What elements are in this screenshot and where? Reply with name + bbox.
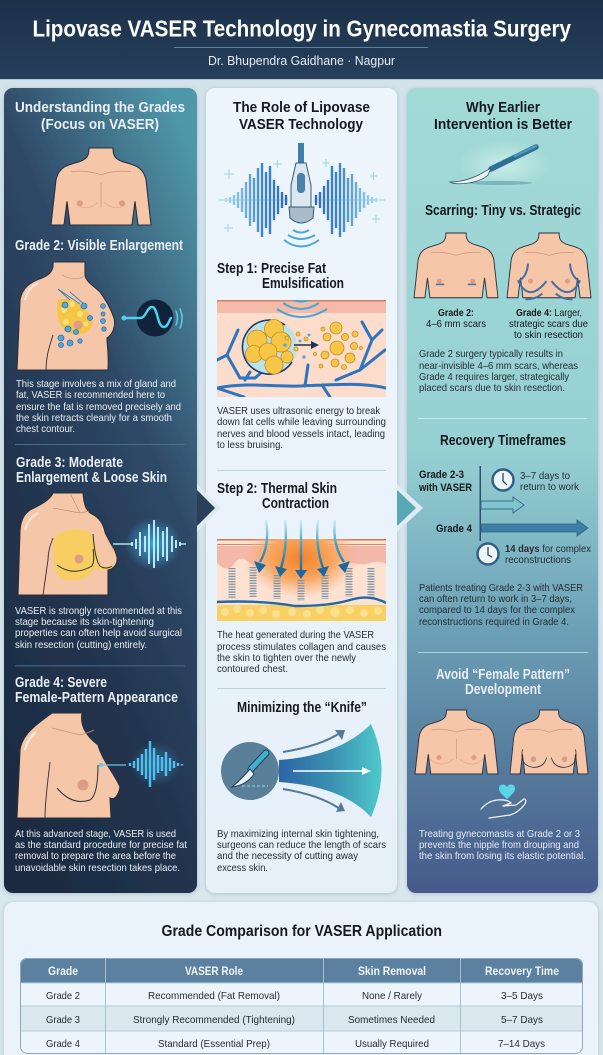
- text: minimizing description: [217, 828, 386, 874]
- heading: role of vaser: VASER Technology: [239, 117, 363, 133]
- text: grade 4 description: At this advanced stage, VASER is used: [15, 828, 176, 840]
- text: step 1 description: down fat cells while leaving surrounding: [217, 416, 386, 428]
- table row: grade 2: Grade 2: [46, 990, 80, 1002]
- heading: grade 4: Female-Pattern Appearance: [15, 690, 178, 706]
- text: step 1 description: VASER uses ultrasonic energy to break: [217, 405, 381, 417]
- label: 3-7 days: 3–7 days to: [520, 470, 570, 482]
- table row: grade 2: [46, 990, 543, 1002]
- caption: grade 2 scars: [426, 307, 486, 330]
- heading: understanding the grades: (Focus on VASER): [41, 117, 159, 133]
- illustration: male-pattern torso: [415, 710, 498, 774]
- heading: step 2: Contraction: [262, 496, 329, 512]
- text: step 2 description: contoured chest.: [217, 663, 288, 675]
- text: avoid description: [419, 828, 586, 862]
- heading: why earlier intervention: Intervention is Better: [434, 117, 572, 133]
- text: grade 4 description: [15, 828, 187, 874]
- heading: role of vaser: [233, 100, 370, 133]
- text: step 1 description: to less bruising.: [217, 439, 283, 451]
- table row: grade 3: Strongly Recommended (Tightening): [133, 1014, 295, 1026]
- text: avoid description: prevents the nipple from drouping and: [419, 839, 579, 851]
- text: scarring description: placed scars due to skin resection.: [419, 382, 565, 394]
- connector arrow: middle to right: [397, 484, 423, 532]
- table row: grade 3: 5–7 Days: [501, 1014, 543, 1026]
- table header row: Grade: [48, 966, 78, 978]
- text: grade 4 description: unavoidable skin resection takes place.: [15, 862, 180, 874]
- label: 14 days: [505, 543, 592, 566]
- text: grade 4 description: as the standard procedure for precise fat: [15, 839, 187, 851]
- text: step 1 description: nerves and blood vessels intact, leading: [217, 428, 385, 440]
- table: grade comparison: [20, 958, 583, 1055]
- text: grade 3 description: VASER is strongly recommended at this: [15, 605, 182, 617]
- heading: recovery timeframes: Recovery Timeframes: [440, 433, 566, 449]
- heading: minimizing the knife: Minimizing the “Knife”: [237, 700, 367, 716]
- heading: step 1: Emulsification: [262, 276, 344, 292]
- text: avoid description: Treating gynecomastis at Grade 2 or 3: [419, 828, 580, 840]
- heading: role of vaser: The Role of Lipovase: [233, 100, 370, 116]
- table row: grade 2: 3–5 Days: [501, 990, 543, 1002]
- panel: understanding the grades: [4, 88, 197, 893]
- heading: step 1: [217, 261, 344, 292]
- illustration: grade 2 torso with tiny scars: [414, 233, 498, 298]
- heading: step 1: Step 1: Precise Fat: [217, 261, 326, 277]
- text: step 1 description: [217, 405, 386, 451]
- heading: understanding the grades: Understanding the Grades: [15, 100, 185, 116]
- text: avoid description: the skin from losing its elastic potential.: [419, 850, 586, 862]
- illustration: female-pattern torso: [510, 710, 588, 774]
- text: grade 4 description: removal to prepare the area before the: [15, 850, 176, 862]
- caption: grade 2 scars: 4–6 mm scars: [426, 318, 486, 330]
- heading: step 2: Step 2: Thermal Skin: [217, 481, 337, 497]
- text: step 2 description: The heat generated during the VASER: [217, 629, 374, 641]
- text: grade 3 description: properties can often help avoid surgical: [15, 627, 182, 639]
- icon: heart over open hand: [481, 784, 526, 818]
- caption: grade 4 scars: strategic scars due: [509, 318, 588, 330]
- text: minimizing description: excess skin.: [217, 862, 268, 874]
- text: grade 2 description: the skin retracts cleanly for a smooth: [16, 412, 172, 424]
- subtitle: Dr. Bhupendra Gaidhane · Nagpur: [208, 54, 395, 68]
- text: grade 2 description: This stage involves a mix of gland and: [16, 378, 176, 390]
- text: recovery description: Patients treating Grade 2-3 with VASER: [419, 582, 583, 594]
- text: step 2 description: [217, 629, 386, 675]
- text: recovery description: compared to 14 days for the complex: [419, 604, 576, 616]
- caption: grade 4 scars: Grade 4: Larger,: [516, 307, 582, 319]
- text: scarring description: Grade 4 requires larger, strategically: [419, 371, 570, 383]
- heading: step 2: [217, 481, 337, 512]
- table header row: Skin Removal: [358, 966, 426, 978]
- text: recovery description: can often return to work in 3–7 days,: [419, 593, 572, 605]
- table row: grade 3: [46, 1014, 543, 1026]
- heading: grade 3: [16, 455, 167, 486]
- chart: recovery timeline: [418, 466, 592, 566]
- label: 3-7 days: return to work: [520, 481, 580, 493]
- table header row: Recovery Time: [485, 966, 559, 978]
- table row: grade 4: Grade 4: [46, 1038, 80, 1050]
- text: step 2 description: process stimulates collagen and causes: [217, 641, 386, 653]
- heading: avoid female pattern: Avoid “Female Pattern”: [436, 667, 570, 683]
- illustration: grade 4 torso with larger scars: [507, 233, 591, 299]
- table row: grade 2: None / Rarely: [362, 990, 423, 1002]
- panel: grade comparison table: [4, 902, 598, 1055]
- panel: why earlier intervention: [407, 88, 598, 893]
- heading: avoid female pattern: Development: [465, 682, 541, 698]
- header banner: [0, 0, 603, 80]
- table header row: [48, 966, 559, 978]
- connector arrow: left to middle: [197, 484, 221, 532]
- text: grade 2 description: chest contour.: [16, 423, 75, 435]
- text: grade 2 description: ensure the fat is removed precisely and: [16, 401, 181, 413]
- icon: ultrasound waveform grade 3: [113, 518, 186, 570]
- caption: grade 4 scars: [509, 307, 588, 341]
- label: 14 days: reconstructions: [505, 554, 571, 566]
- heading: grade 3: Enlargement & Loose Skin: [16, 470, 167, 486]
- illustration: grade 4 chest: [17, 713, 120, 818]
- table row: grade 2: Recommended (Fat Removal): [148, 990, 280, 1002]
- table row: grade 4: [46, 1038, 545, 1050]
- heading: avoid female pattern: [436, 667, 570, 698]
- icon: vaser probe with waves: [219, 143, 385, 246]
- heading: why earlier intervention: [434, 100, 572, 133]
- arrow: grade 4 recovery: [481, 520, 588, 536]
- text: grade 3 description: skin resection (cutting) entirely.: [15, 639, 147, 651]
- illustration: male chest: [51, 148, 151, 225]
- text: scarring description: Grade 2 surgery typically results in: [419, 348, 563, 360]
- table row: grade 3: Grade 3: [46, 1014, 80, 1026]
- illustration: fat emulsification: [217, 298, 386, 397]
- illustration: grade 2 chest with fat and gland: [17, 262, 115, 370]
- text: scarring description: [419, 348, 578, 394]
- text: recovery description: [419, 582, 583, 628]
- text: minimizing description: By maximizing internal skin tightening,: [217, 828, 379, 840]
- table row: grade 4: 7–14 Days: [498, 1038, 545, 1050]
- panel: role of lipovase vaser: [206, 88, 397, 893]
- text: grade 2 description: fat, VASER is recommended here to: [16, 389, 165, 401]
- heading: grade 4: Grade 4: Severe: [15, 675, 107, 691]
- heading: grade 3: Grade 3: Moderate: [16, 455, 123, 471]
- text: grade 2 description: [16, 378, 181, 435]
- icon: ultrasound waveform grade 4: [99, 741, 182, 787]
- text: grade 3 description: [15, 605, 182, 651]
- heading: grade 2: Grade 2: Visible Enlargement: [15, 238, 183, 254]
- caption: grade 2 scars: Grade 2:: [438, 307, 474, 319]
- label: grade 2-3: Grade 2-3: [419, 469, 464, 481]
- illustration: scalpel and skin tightening fan: [221, 724, 382, 817]
- illustration: grade 3 chest: [18, 493, 117, 595]
- table row: grade 4: Usually Required: [355, 1038, 429, 1050]
- text: step 2 description: the skin to tighten over the newly: [217, 652, 357, 664]
- label: 14 days: 14 days for complex: [505, 543, 592, 555]
- label: grade 2-3: with VASER: [418, 482, 472, 494]
- table row: grade 4: Standard (Essential Prep): [158, 1038, 270, 1050]
- text: grade 3 description: stage because its skin-tightening: [15, 616, 154, 628]
- heading: why earlier intervention: Why Earlier: [466, 100, 540, 116]
- label: 3-7 days: [520, 470, 580, 493]
- icon: scalpel: [450, 140, 553, 190]
- illustration: thermal skin contraction: [217, 518, 386, 621]
- table row: grade 3: Sometimes Needed: [348, 1014, 435, 1026]
- text: minimizing description: surgeons can reduce the length of scars: [217, 839, 386, 851]
- label: grade 4: Grade 4: [436, 523, 473, 535]
- caption: grade 4 scars: to skin resection: [514, 329, 583, 341]
- text: minimizing description: and the necessity of cutting away: [217, 850, 359, 862]
- table header row: VASER Role: [185, 966, 243, 978]
- arrow: grade 2-3 recovery: [481, 497, 524, 513]
- text: recovery description: reconstructions required in Grade 4.: [419, 616, 569, 628]
- heading: grade 4: [15, 675, 178, 706]
- icon: ultrasound wave badge: [122, 300, 182, 336]
- heading: understanding the grades: [15, 100, 185, 133]
- icon: clock 14 days: [478, 544, 498, 564]
- icon: clock 3-7 days: [492, 470, 514, 490]
- text: scarring description: near-invisible 4–6 mm scars, whereas: [419, 360, 578, 372]
- heading: table title: Grade Comparison for VASER Application: [162, 923, 442, 940]
- label: grade 2-3: [418, 469, 472, 494]
